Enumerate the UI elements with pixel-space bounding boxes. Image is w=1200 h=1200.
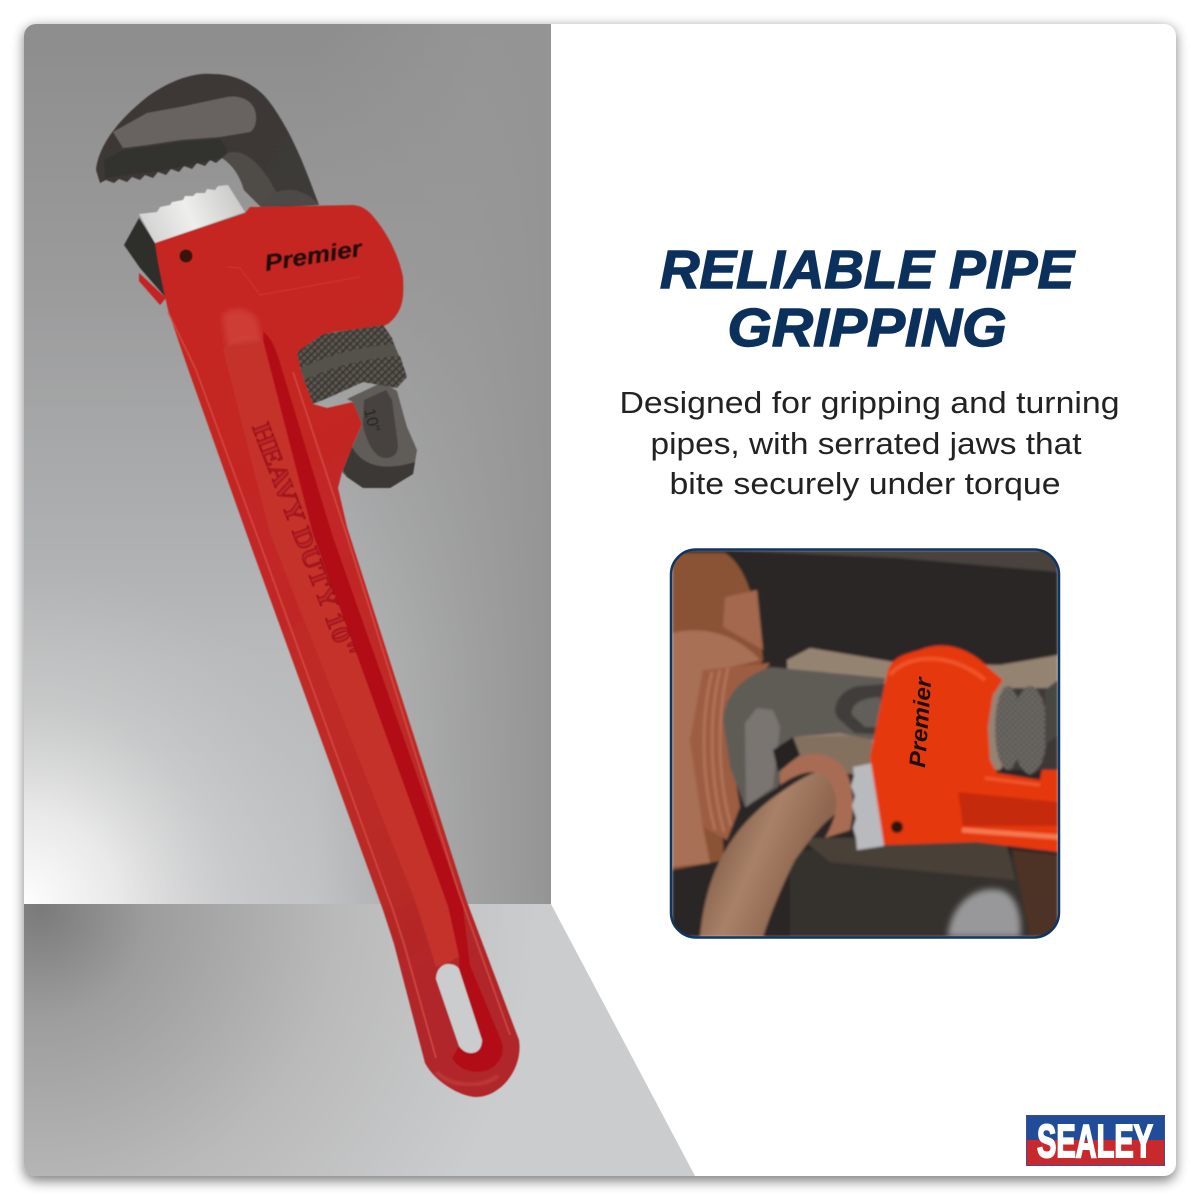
description text: Designed for gripping and turning bbox=[620, 385, 1120, 420]
brand text: Premier: Premier bbox=[263, 235, 365, 276]
worm screw and lower jaw bbox=[342, 382, 417, 488]
lower steel jaw bbox=[124, 185, 245, 305]
rivet bbox=[180, 250, 192, 262]
description text: bite securely under torque bbox=[670, 466, 1060, 501]
knurled adjustment nut bbox=[297, 325, 407, 404]
pale rear pipe bbox=[787, 648, 1058, 770]
red wrench body bbox=[155, 205, 520, 1097]
upper hook jaw bbox=[96, 74, 319, 208]
rail highlights bbox=[168, 312, 436, 1058]
heading: RELIABLE PIPE bbox=[660, 240, 1076, 300]
steel jaw teeth bbox=[851, 763, 884, 850]
hole in handle bbox=[436, 964, 482, 1053]
photo: wrench gripping copper pipe bbox=[671, 550, 1059, 938]
copper pipe bbox=[700, 769, 846, 937]
background flange bbox=[672, 553, 763, 870]
description text bbox=[620, 385, 1120, 501]
photo brand text: Premier bbox=[904, 676, 936, 768]
worm screw and lower jaw: 10" bbox=[360, 407, 382, 434]
photo knurl nut bbox=[1010, 688, 1058, 770]
panel: studio backdrop bbox=[24, 24, 695, 1176]
dusty area under jaw bbox=[793, 735, 875, 776]
handle centre band bbox=[223, 336, 459, 967]
dark lower pipe bbox=[1012, 850, 1058, 937]
heading bbox=[660, 240, 1076, 358]
threaded section bbox=[690, 663, 770, 840]
embossed text: heavy duty: HEAVY DUTY 10" bbox=[246, 419, 363, 663]
red head bbox=[870, 646, 1058, 852]
lower dark area bbox=[791, 851, 1028, 936]
heading: GRIPPING bbox=[728, 298, 1006, 358]
dark groove bbox=[263, 332, 503, 1072]
description text: pipes, with serrated jaws that bbox=[650, 426, 1082, 461]
red head highlights bbox=[890, 659, 985, 680]
rivet bbox=[891, 821, 903, 833]
grey jaw bbox=[723, 667, 885, 807]
large flange bbox=[672, 630, 760, 867]
product: pipe wrench bbox=[96, 74, 520, 1097]
hex nut bbox=[723, 590, 763, 650]
mid pipe bbox=[800, 838, 1015, 880]
pale blob bbox=[948, 889, 1021, 937]
